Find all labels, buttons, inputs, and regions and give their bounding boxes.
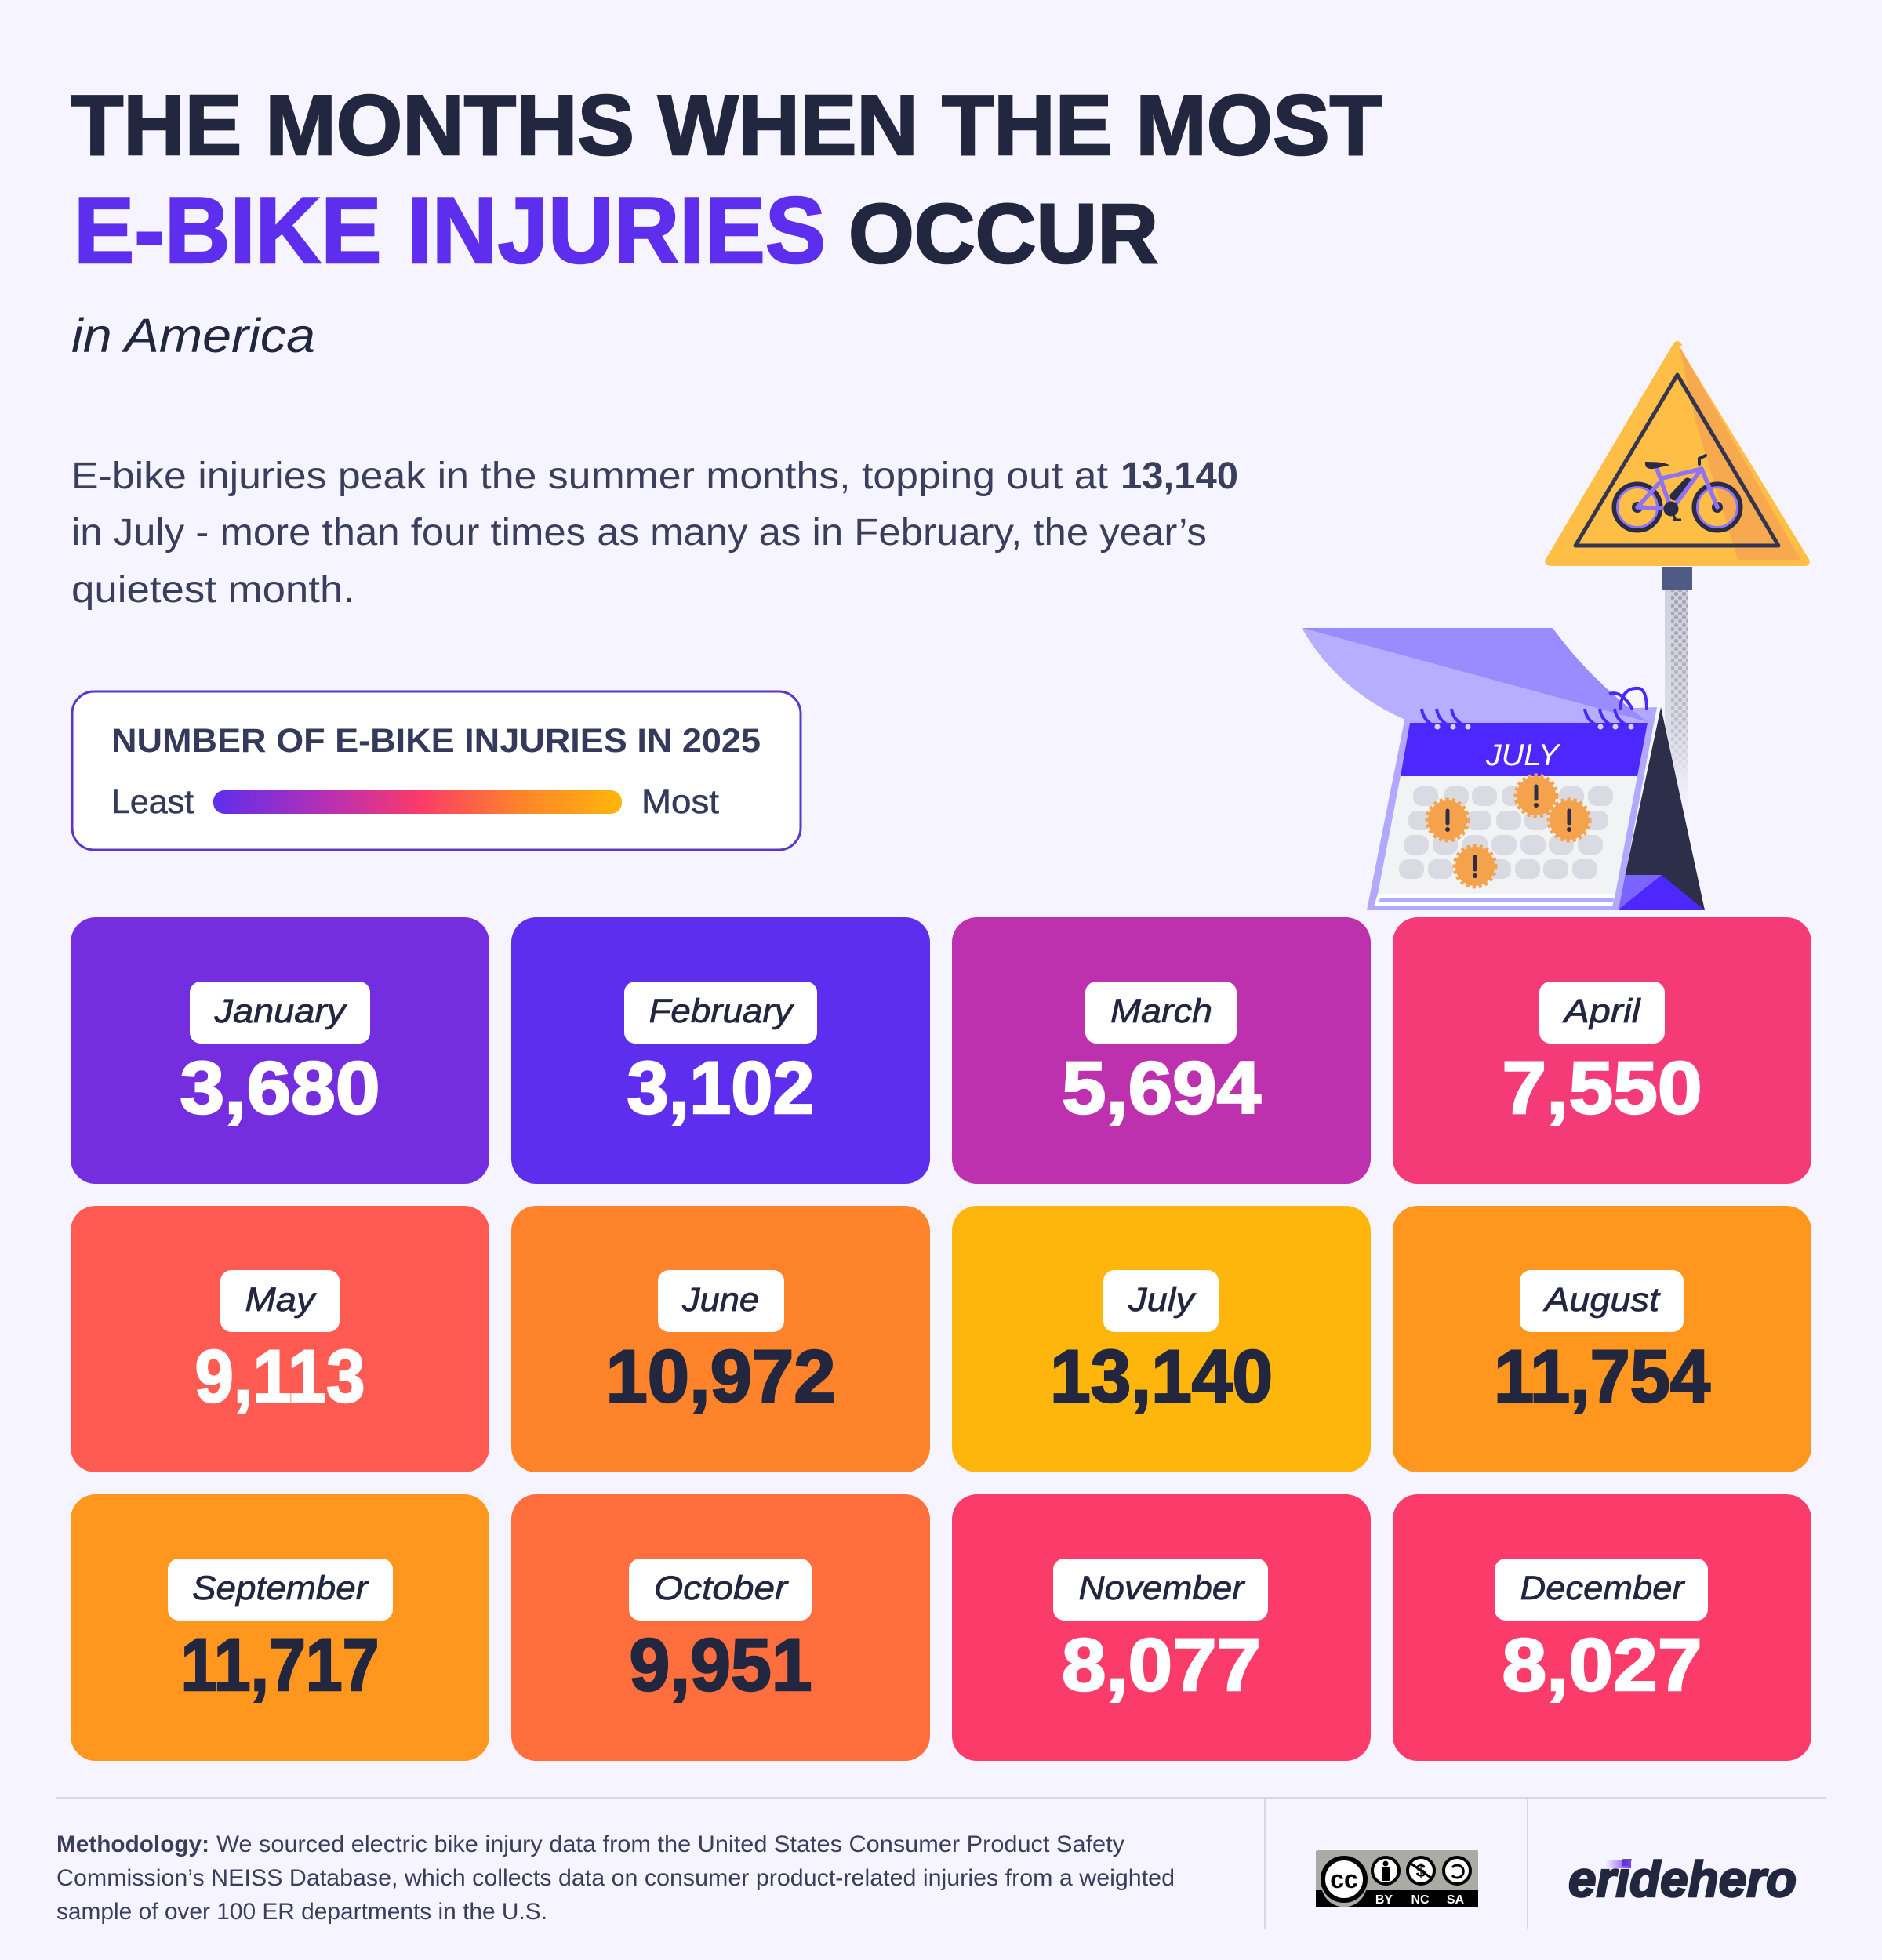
month label: September (192, 1570, 369, 1607)
value: 3,102 (627, 1047, 814, 1130)
intro paragraph: 13,140 (1121, 456, 1238, 497)
title: E-BIKE INJURIES (74, 178, 826, 283)
card: August (1393, 1206, 1811, 1472)
month label: June (681, 1281, 759, 1319)
month label: March (1110, 993, 1212, 1030)
intro paragraph (71, 456, 1238, 611)
card: January (71, 917, 489, 1184)
icon: e-bike (1614, 456, 1741, 530)
intro paragraph: in July - more than four times as many as in February, the year’s (71, 512, 1207, 554)
intro paragraph: E-bike injuries peak in the summer months, topping out at (71, 456, 1108, 497)
value: 5,694 (1062, 1047, 1261, 1130)
calendar header (1401, 723, 1648, 776)
legend gradient bar (213, 790, 622, 814)
month label: December (1520, 1570, 1685, 1607)
icon: creative commons license badge (1316, 1850, 1478, 1907)
icon: creative commons license badge: NC (1411, 1893, 1430, 1907)
calendar easel stand (1618, 707, 1705, 910)
illustration: July calendar with alert badges (1302, 628, 1705, 910)
icon: creative commons license badge: BY (1375, 1893, 1393, 1907)
card: November (952, 1494, 1371, 1761)
card: March (952, 917, 1371, 1184)
icon: creative commons license badge: $ (1416, 1860, 1426, 1881)
month label (1495, 1559, 1708, 1621)
icon: creative commons license badge: cc (1330, 1865, 1358, 1893)
card: February (511, 917, 930, 1184)
card: May (71, 1206, 489, 1472)
icon: alert badge (1455, 846, 1495, 887)
month label (658, 1270, 784, 1332)
legend title: NUMBER OF E-BIKE INJURIES IN 2025 (111, 722, 761, 760)
logo: eridehero: eridehero (1568, 1851, 1797, 1907)
calendar day cells (1399, 786, 1613, 879)
month label: October (654, 1570, 789, 1607)
card: April (1393, 917, 1811, 1184)
methodology note: Commission’s NEISS Database, which collects data on consumer product-related injuries from a weighted (56, 1865, 1175, 1891)
month label (220, 1270, 340, 1332)
month label (624, 982, 817, 1044)
calendar sheets (1374, 894, 1615, 906)
month label (1539, 982, 1665, 1044)
value: 3,680 (180, 1047, 380, 1130)
legend (72, 691, 801, 850)
month label (1053, 1559, 1268, 1621)
value: 8,027 (1502, 1624, 1702, 1707)
value: 11,754 (1494, 1335, 1710, 1418)
icon: alert badge (1427, 800, 1468, 840)
card: June (511, 1206, 930, 1472)
subtitle: in America (71, 309, 315, 362)
icon: alert badge (1549, 800, 1590, 840)
month label (1103, 1270, 1219, 1332)
month label (1520, 1270, 1684, 1332)
calendar page (1378, 776, 1637, 894)
illustration: road warning sign with e-bike (1546, 342, 1809, 818)
calendar back board (1367, 707, 1657, 910)
title: OCCUR (848, 186, 1158, 281)
methodology note (56, 1831, 1175, 1925)
methodology note: sample of over 100 ER departments in the U.S. (56, 1899, 547, 1925)
card: September (71, 1494, 489, 1761)
value: 9,951 (629, 1624, 812, 1707)
month label (168, 1559, 393, 1621)
month label: August (1542, 1281, 1661, 1319)
icon: alert badge (1516, 775, 1557, 816)
month label: November (1079, 1570, 1245, 1607)
methodology note: We sourced electric bike injury data from the United States Consumer Product Safety (216, 1831, 1124, 1857)
month label (1085, 982, 1237, 1044)
legend label: most: Most (641, 783, 719, 821)
title: THE MONTHS WHEN THE MOST (71, 78, 1382, 173)
value: 7,550 (1502, 1047, 1702, 1130)
calendar binding rings (1422, 688, 1647, 729)
legend label: least: Least (111, 783, 194, 821)
warning triangle (1546, 342, 1809, 565)
value: 13,140 (1050, 1335, 1273, 1418)
methodology note: Methodology: (56, 1831, 209, 1857)
month label: January (213, 993, 347, 1030)
calendar turning page (1302, 628, 1648, 722)
value: 11,717 (180, 1624, 380, 1707)
month label: February (649, 993, 794, 1030)
month label: April (1561, 993, 1641, 1030)
month label: July (1128, 1281, 1197, 1319)
value: 8,077 (1062, 1624, 1261, 1707)
value: 9,113 (194, 1335, 365, 1418)
value: 10,972 (605, 1335, 836, 1418)
card: October (511, 1494, 930, 1761)
month label: May (245, 1281, 317, 1319)
month label (629, 1559, 812, 1621)
card: December (1393, 1494, 1811, 1761)
month label (190, 982, 370, 1044)
sign pole (1662, 567, 1692, 789)
calendar month name: JULY (1485, 739, 1561, 772)
intro paragraph: quietest month. (71, 569, 354, 611)
title (71, 78, 1382, 283)
card: July (952, 1206, 1371, 1472)
icon: creative commons license badge: SA (1447, 1893, 1465, 1907)
